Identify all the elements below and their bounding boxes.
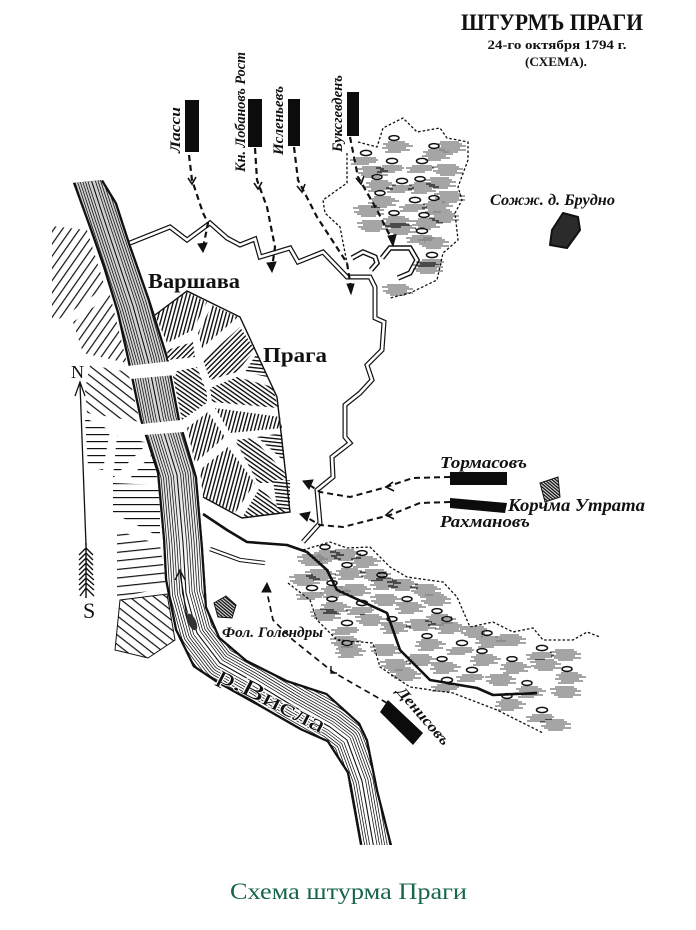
label: river Vistula: р.Висла: [213, 662, 331, 739]
compass arrow: north-south: S: [83, 598, 95, 623]
label: Brudno: Сожж. д. Брудно: [490, 192, 615, 209]
marsh north-east: [323, 118, 468, 298]
troop column: Tormasov: [303, 453, 527, 497]
fort Golendry marker: [214, 596, 236, 618]
troop column: Buxhoeveden: Буксгевденъ: [330, 75, 346, 153]
stream: [203, 514, 537, 695]
troop column: Lassi: [168, 100, 208, 252]
marsh south-east: [288, 542, 600, 733]
troop column: Islenyev: Исленьевъ: [271, 86, 287, 156]
river flotilla arrow: [175, 570, 199, 632]
label: Korchma Utrata: Корчма Утрата: [507, 495, 645, 515]
island in the floodplain: [210, 549, 265, 563]
title: [461, 10, 643, 69]
label: Fort Golendry: Фол. Голендры: [222, 625, 323, 641]
troop column: Denisov: Денисовъ: [391, 682, 452, 749]
Warsaw district blocks: [52, 226, 175, 658]
troop column: Tormasov: Тормасовъ: [440, 453, 527, 472]
troop column: Islenyev: [271, 86, 354, 294]
troop column: Rakhmanov: [300, 498, 530, 531]
title: 24-го октября 1794 г.: [488, 37, 626, 52]
river Vistula: [60, 170, 392, 860]
label: Warsaw: Варшава: [148, 269, 241, 293]
compass arrow: north-south: [71, 362, 95, 623]
burned village Brudno marker: [550, 213, 580, 248]
bridges across the river: [127, 361, 184, 435]
Praga district blocks: [155, 291, 290, 518]
troop column: Denisov: [262, 583, 452, 749]
troop column: Lobanov-Rostovsky: [233, 52, 276, 272]
troop column: Lobanov-Rostovsky: Кн. Лобановъ Рост: [233, 52, 249, 173]
troop column: Rakhmanov: Рахмановъ: [439, 512, 530, 531]
label: Praga: Прага: [263, 343, 328, 367]
title: (СХЕМА).: [525, 54, 587, 69]
troop column: Buxhoeveden: [330, 75, 396, 246]
fortification line: [130, 223, 417, 542]
troop column: Lassi: Ласси: [168, 107, 184, 154]
title: ШТУРМЪ ПРАГИ: [461, 10, 643, 35]
caption: Схема штурма Праги: [230, 879, 467, 904]
inn Utrata marker: [540, 477, 560, 502]
compass arrow: north-south: N: [71, 362, 84, 382]
